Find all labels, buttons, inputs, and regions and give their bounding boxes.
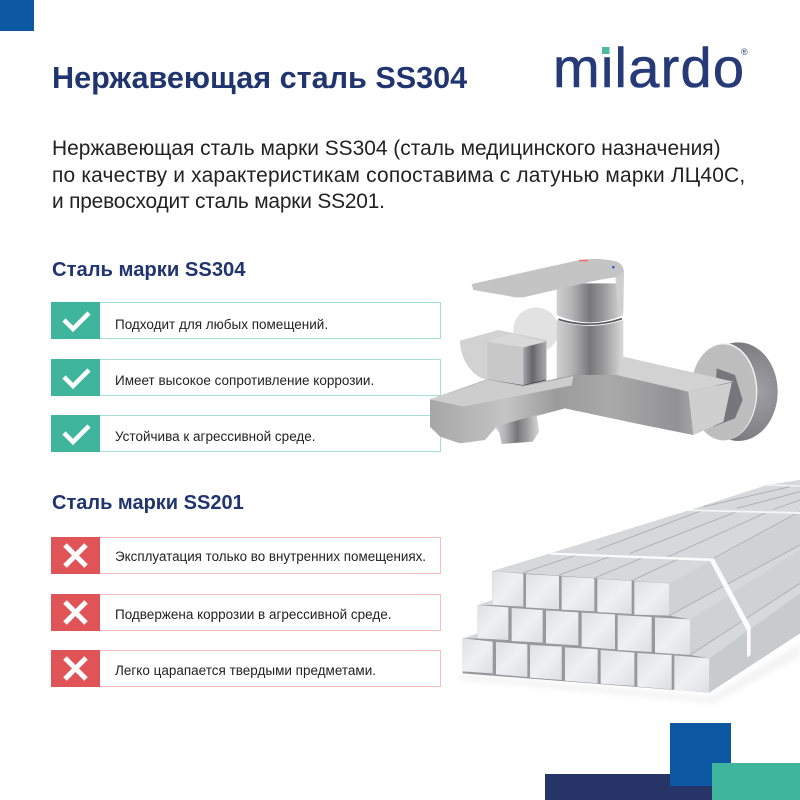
illustration: faucet <box>430 258 778 444</box>
corner square <box>0 0 34 31</box>
row: SS201 item 3 <box>51 650 441 687</box>
title: Нержавеющая сталь SS304 <box>52 61 467 95</box>
icon: check 3 <box>51 415 100 452</box>
row: SS304 item 3 <box>51 415 441 452</box>
logo: ® <box>741 47 748 57</box>
icon: check 2 <box>51 359 100 396</box>
text: SS304 item 3: Устойчива к агрессивной среде. <box>115 429 316 444</box>
heading: SS201: Сталь марки SS201 <box>52 492 244 514</box>
decoration: navy block <box>545 774 715 800</box>
logo: milardo <box>553 36 744 99</box>
illustration: stacked steel bars <box>462 480 800 702</box>
text: SS201 item 3: Легко царапается твердыми предметами. <box>115 663 376 678</box>
intro text: и превосходит сталь марки SS201. <box>52 190 385 213</box>
row: SS201 item 2 <box>51 594 441 631</box>
decoration: blue block <box>670 723 731 786</box>
text: SS304 item 2: Имеет высокое сопротивление коррозии. <box>115 373 374 388</box>
row: SS304 item 2 <box>51 359 441 396</box>
decoration: teal block <box>712 763 800 800</box>
row: SS201 item 1 <box>51 537 441 574</box>
text: SS201 item 1: Эксплуатация только во внутренних помещениях. <box>115 549 426 564</box>
text: SS201 item 2: Подвержена коррозии в агрессивной среде. <box>115 607 392 622</box>
icon: check 1 <box>51 302 100 339</box>
intro text: по качеству и характеристикам сопоставима с латунью марки ЛЦ40С, <box>52 164 745 186</box>
icon: cross 3 <box>51 650 100 687</box>
text: SS304 item 1: Подходит для любых помещений. <box>115 317 328 332</box>
icon: cross 1 <box>51 537 100 574</box>
row: SS304 item 1 <box>51 302 441 339</box>
heading: SS304: Сталь марки SS304 <box>52 259 246 281</box>
icon: cross 2 <box>51 594 100 631</box>
intro text: Нержавеющая сталь марки SS304 (сталь медицинского назначения) <box>52 137 721 160</box>
intro text <box>52 137 745 213</box>
